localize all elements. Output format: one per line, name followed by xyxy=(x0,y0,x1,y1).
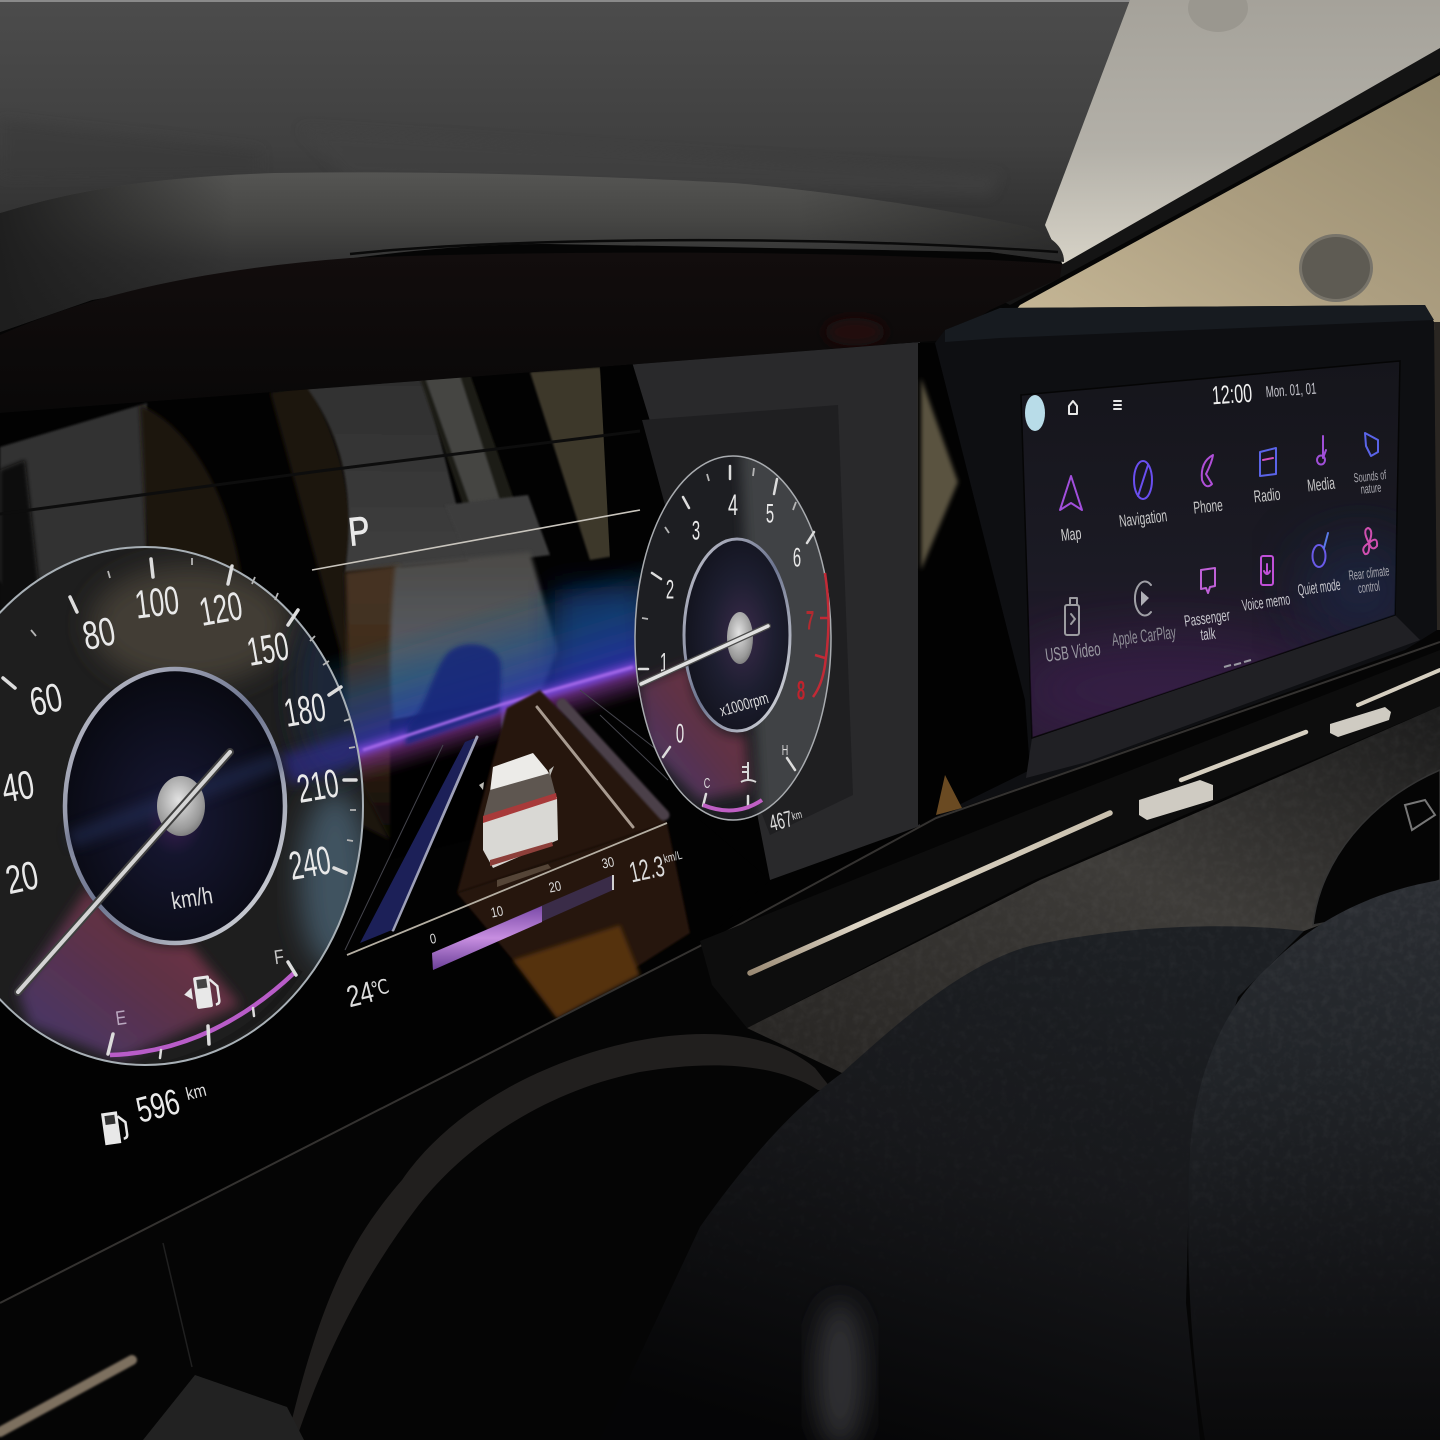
label: passenger talk: talk xyxy=(1200,624,1217,644)
reflection: light pillar xyxy=(425,375,500,505)
dash wood texture xyxy=(747,706,1440,1073)
icon: radio xyxy=(1260,448,1276,476)
range readout left xyxy=(101,1080,208,1145)
speed needle xyxy=(18,752,230,992)
reflection: black panel shadow xyxy=(590,560,770,946)
color sweep band xyxy=(328,565,642,780)
label: passenger talk: Passenger xyxy=(1183,606,1231,630)
steering wheel gloss spot xyxy=(816,1300,864,1440)
speed numbers: 100 xyxy=(132,578,182,628)
speedometer face xyxy=(0,547,363,1065)
wiper stalk icon xyxy=(1405,800,1435,830)
lower left door trim xyxy=(0,1360,132,1432)
speed minor ticks xyxy=(31,558,356,841)
blue glow beside road xyxy=(555,585,645,690)
gear indicator P: P xyxy=(346,507,372,555)
reflection: window cross line xyxy=(0,431,640,514)
rim leather texture xyxy=(1190,880,1440,1400)
coolant C H labels xyxy=(704,742,788,791)
display purple glow xyxy=(1000,540,1420,745)
label: quiet mode: Quiet mode xyxy=(1296,575,1342,599)
rpm minor ticks xyxy=(642,468,796,619)
rpm numbers: 5 xyxy=(766,498,774,528)
windshield upper area xyxy=(0,0,1135,240)
icon: sounds of nature xyxy=(1365,433,1378,456)
car mirrors xyxy=(479,766,554,790)
bar track xyxy=(432,875,613,970)
vehicle rendering xyxy=(479,753,558,887)
brown upper tone xyxy=(90,565,290,685)
speed numbers: 20 xyxy=(2,853,42,903)
vent trim silver line xyxy=(750,813,1110,973)
cluster screen xyxy=(0,342,920,1018)
fuel economy bar xyxy=(429,850,684,970)
lower dash panel xyxy=(747,706,1440,1073)
reflection: inner pillar xyxy=(420,377,513,503)
coolant icon xyxy=(741,762,756,782)
instrument binnacle arc xyxy=(287,1034,834,1440)
road surface xyxy=(457,690,667,893)
reflection: gray gauge backing xyxy=(642,405,853,835)
range unit: km xyxy=(184,1080,208,1104)
menu icon xyxy=(1114,401,1121,409)
cream headliner and windshield edge xyxy=(1045,0,1440,270)
bezel top lip xyxy=(945,305,1434,342)
fuel E F labels: F xyxy=(273,945,285,969)
speed numbers: 180 xyxy=(281,686,329,736)
bar scale labels: 30 xyxy=(600,854,616,872)
icon: usb video xyxy=(1065,598,1079,635)
windshield dim reflections xyxy=(0,120,1000,195)
bezel black left side xyxy=(918,343,1030,825)
label: voice memo: Voice memo xyxy=(1241,589,1291,615)
icon: quiet mode xyxy=(1312,533,1328,567)
rpm numbers xyxy=(660,490,814,748)
dashboard side shading xyxy=(0,172,1064,332)
coolant arc xyxy=(703,800,762,810)
label: rear climate control xyxy=(1348,564,1390,597)
car body xyxy=(483,797,558,868)
vent trim far line xyxy=(1358,670,1440,705)
coolant C H labels: H xyxy=(782,742,788,758)
tach range readout: km xyxy=(790,809,804,823)
label: radio: Radio xyxy=(1253,484,1281,506)
rpm numbers: 6 xyxy=(793,542,801,572)
label: rear climate control: Rear climate xyxy=(1348,564,1390,584)
blue band in face xyxy=(280,728,370,785)
bar fill xyxy=(432,906,542,970)
icon: map xyxy=(1060,476,1082,510)
dashboard underside xyxy=(0,253,1062,413)
label: navigation: Navigation xyxy=(1118,505,1168,531)
screen base xyxy=(0,340,920,1310)
bar scale labels xyxy=(429,854,616,947)
reflection: tan post xyxy=(530,367,610,561)
speedometer outer rim xyxy=(0,547,363,1065)
icon: apple carplay xyxy=(1135,582,1151,615)
tan gap upper xyxy=(921,378,958,570)
bar scale labels: 0 xyxy=(429,931,437,947)
steering wheel rim xyxy=(1188,880,1440,1440)
gray right tone xyxy=(740,450,840,820)
speed numbers: 60 xyxy=(26,675,66,725)
vent knob right xyxy=(1330,707,1391,737)
rpm numbers: 2 xyxy=(666,574,674,604)
face tones xyxy=(18,565,375,1070)
right edge interior xyxy=(1434,322,1440,630)
display surface xyxy=(1021,361,1400,738)
economy value: 12.3 xyxy=(627,850,667,890)
bar scale labels: 10 xyxy=(489,903,505,921)
rpm numbers: 1 xyxy=(660,647,668,677)
rpm needle xyxy=(641,626,768,684)
reflection: left brown seat xyxy=(270,385,390,840)
infotainment display xyxy=(1000,361,1420,745)
profile avatar xyxy=(1025,395,1045,431)
fuel E F labels: E xyxy=(114,1006,128,1030)
fuel E F labels xyxy=(114,945,285,1030)
icon: media xyxy=(1317,436,1326,464)
door speaker grille xyxy=(1299,234,1373,302)
coolant C H labels: C xyxy=(704,775,710,791)
label: sounds of nature: nature xyxy=(1360,481,1382,497)
icon: navigation xyxy=(1134,461,1152,499)
temperature unit: ℃ xyxy=(369,975,391,1001)
rpm numbers: 8 xyxy=(797,675,805,705)
speed numbers: 150 xyxy=(244,625,292,675)
label: phone: Phone xyxy=(1192,495,1224,517)
page dots xyxy=(1224,660,1251,667)
fuel pump icon xyxy=(182,974,220,1011)
lower console panel xyxy=(143,1375,304,1440)
inner dial xyxy=(65,669,285,943)
reflection: headrest shadow xyxy=(138,405,242,572)
label: passenger talk xyxy=(1183,606,1231,644)
temperature value: 24 xyxy=(343,974,377,1014)
center vent housing xyxy=(700,650,1440,1028)
speed major ticks xyxy=(3,559,356,873)
range value: 596 xyxy=(132,1081,184,1131)
car rear window xyxy=(483,773,556,818)
slate lower-right tone xyxy=(299,790,371,970)
center display bezel xyxy=(935,305,1437,815)
icon: voice memo xyxy=(1261,556,1273,585)
lower left dash line xyxy=(163,1243,192,1367)
speed numbers: 80 xyxy=(79,609,119,659)
blue road shoulder xyxy=(360,738,475,943)
thin diagonal lines xyxy=(345,690,670,950)
bar end cap xyxy=(612,875,614,890)
tach face xyxy=(635,456,831,820)
dark A-pillar strip xyxy=(1000,48,1440,305)
windshield top edge xyxy=(0,0,1130,2)
horizon line xyxy=(312,510,640,570)
tach lit sector xyxy=(640,664,750,800)
road edge stripes xyxy=(393,704,664,930)
home icon xyxy=(1069,401,1077,414)
speed numbers: 240 xyxy=(286,839,334,889)
tach inner dial xyxy=(684,539,790,731)
reflection: window lower xyxy=(455,494,550,560)
divider line xyxy=(347,823,667,955)
strip under display xyxy=(1026,615,1420,778)
lit pink sector xyxy=(18,885,240,1060)
rpm ticks xyxy=(639,466,814,808)
tach inner ring xyxy=(684,539,790,731)
wiper stalk xyxy=(1313,770,1440,925)
speed numbers xyxy=(0,578,342,903)
reflection: left edge pillar xyxy=(0,459,40,610)
steering wheel hub xyxy=(600,926,1304,1440)
dark silhouette head xyxy=(405,644,501,745)
tachometer gauge xyxy=(635,450,840,837)
speedometer gauge xyxy=(0,547,375,1070)
beige A-pillar trim xyxy=(1000,75,1440,330)
speed numbers: 210 xyxy=(294,762,342,812)
rpm numbers: 3 xyxy=(692,515,700,545)
dark lower band xyxy=(140,970,300,1070)
economy unit: km/L xyxy=(662,850,684,866)
car taillight xyxy=(483,793,557,823)
vent trim upper line xyxy=(1181,732,1306,780)
car bumper xyxy=(490,842,553,866)
hub leather texture xyxy=(640,926,1304,1400)
tan gap lower xyxy=(936,775,962,815)
icon: phone xyxy=(1202,455,1213,486)
rpm numbers: 7 xyxy=(806,605,814,635)
label: map: Map xyxy=(1060,523,1082,545)
label: apple carplay: Apple CarPlay xyxy=(1111,623,1178,651)
reflection: center window xyxy=(307,378,470,572)
rpm numbers: 0 xyxy=(676,718,684,748)
orange lower seat xyxy=(513,925,640,1018)
range fuel icon xyxy=(101,1110,128,1145)
brown lower seat xyxy=(457,823,690,1018)
vent knob left xyxy=(1139,780,1213,820)
dashboard red glow xyxy=(825,318,885,346)
reflection: left window xyxy=(0,402,148,582)
reflection: black post xyxy=(600,367,649,558)
tach tones xyxy=(640,450,840,820)
outside temperature xyxy=(343,974,391,1014)
reflection: seat gray blue xyxy=(388,553,558,729)
rpm hub xyxy=(727,612,753,664)
tach range readout: 467 xyxy=(767,807,795,837)
blue streak across dial xyxy=(70,760,280,840)
label: usb video: USB Video xyxy=(1044,639,1102,667)
ceiling speaker xyxy=(1188,0,1248,32)
reflection: right panel xyxy=(632,342,920,880)
label: rear climate control: control xyxy=(1357,579,1381,597)
rpm numbers: 4 xyxy=(728,490,738,522)
bar scale labels: 20 xyxy=(547,878,563,896)
fuel arc xyxy=(110,973,294,1055)
navy right tone xyxy=(290,628,360,780)
date: Mon. 01, 01 xyxy=(1265,379,1317,401)
tach rim xyxy=(635,456,831,820)
km/h label: km/h xyxy=(169,881,215,915)
redline xyxy=(813,573,828,697)
label: media: Media xyxy=(1306,473,1336,495)
rpm unit label: x1000rpm xyxy=(718,688,770,720)
dashboard top surface xyxy=(0,172,1064,332)
dashboard groove xyxy=(350,240,1058,254)
icon: passenger talk xyxy=(1201,568,1215,593)
speed numbers: 120 xyxy=(196,585,246,635)
inner chrome ring xyxy=(65,669,285,943)
label: sounds of nature xyxy=(1353,468,1387,497)
car roof xyxy=(490,753,550,792)
screen lower edge xyxy=(0,642,1440,1303)
car shadow xyxy=(497,864,551,887)
fuel ticks xyxy=(108,962,296,1058)
label: sounds of nature: Sounds of xyxy=(1353,468,1387,486)
dark silhouette lower xyxy=(389,712,502,838)
speed needle hub xyxy=(157,776,205,836)
bright sweep line xyxy=(363,667,633,750)
reflection: seat tan xyxy=(343,564,398,836)
icon: rear climate xyxy=(1363,528,1377,554)
clock: 12:00 xyxy=(1211,378,1253,410)
